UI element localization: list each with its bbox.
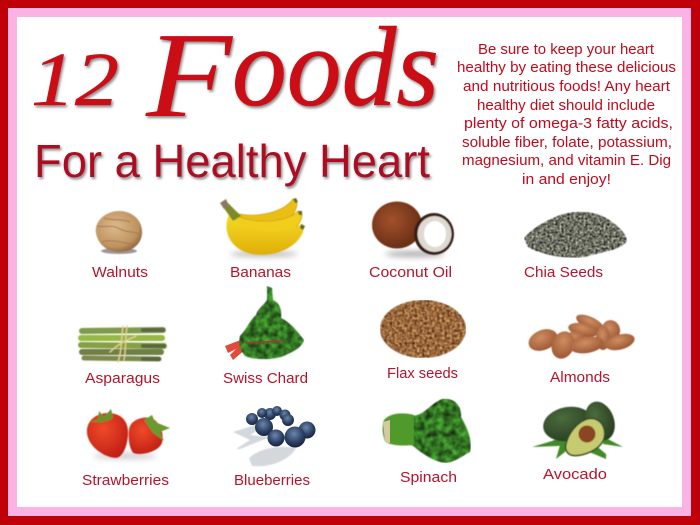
food: walnuts bbox=[92, 211, 148, 281]
title: 12 Foods bbox=[31, 5, 439, 143]
intro paragraph: Be sure to keep your heart bbox=[478, 41, 655, 58]
icon: spinach bbox=[383, 399, 471, 463]
icon: strawberries bbox=[87, 409, 170, 459]
food: bananas bbox=[220, 198, 305, 281]
intro paragraph: healthy by eating these delicious bbox=[457, 59, 676, 76]
food: almonds bbox=[525, 311, 636, 386]
icon: chia seeds pile bbox=[524, 212, 627, 258]
food: coconut oil bbox=[369, 202, 454, 281]
icon: almonds bbox=[525, 311, 636, 362]
icon: asparagus bundle bbox=[81, 326, 164, 362]
food: avocado bbox=[532, 397, 623, 483]
label: Almonds: Almonds bbox=[550, 369, 610, 386]
title: 12 Foods: 12 bbox=[31, 38, 119, 122]
label: Bananas: Bananas bbox=[230, 264, 291, 281]
intro paragraph: healthy diet should include bbox=[477, 97, 655, 114]
icon: swiss chard bbox=[225, 286, 304, 360]
intro paragraph: and nutritious foods! Any heart bbox=[463, 78, 671, 95]
label: Flax seeds: Flax seeds bbox=[387, 365, 458, 382]
label: Asparagus: Asparagus bbox=[85, 370, 160, 387]
title: 12 Foods: oods bbox=[232, 5, 439, 130]
title: 12 Foods: F bbox=[145, 8, 234, 143]
intro paragraph: plenty of omega-3 fatty acids, bbox=[464, 115, 673, 132]
intro paragraph bbox=[457, 41, 676, 188]
food: chia seeds bbox=[524, 212, 627, 281]
food: blueberries bbox=[233, 406, 316, 489]
icon: avocado bbox=[532, 397, 623, 459]
intro paragraph: in and enjoy! bbox=[522, 171, 611, 188]
intro paragraph: magnesium, and vitamin E. Dig bbox=[462, 152, 671, 169]
food: flax seeds bbox=[380, 300, 466, 382]
label: Coconut Oil: Coconut Oil bbox=[369, 264, 452, 281]
label: Spinach: Spinach bbox=[400, 469, 457, 486]
subtitle: For a Healthy Heart: For a Healthy Heart bbox=[34, 135, 430, 187]
food: spinach bbox=[383, 399, 471, 486]
label: Chia Seeds: Chia Seeds bbox=[524, 264, 603, 281]
label: Strawberries: Strawberries bbox=[82, 472, 169, 489]
icon: walnut bbox=[96, 211, 142, 254]
label: Swiss Chard: Swiss Chard bbox=[223, 370, 308, 387]
intro paragraph: soluble fiber, folate, potassium, bbox=[462, 134, 672, 151]
food: strawberries bbox=[82, 409, 170, 489]
icon: flax seeds pile bbox=[380, 300, 466, 358]
icon: bananas bbox=[220, 198, 305, 257]
food: swiss chard bbox=[223, 286, 308, 387]
label: Avocado: Avocado bbox=[543, 466, 607, 483]
icon: blueberries bbox=[233, 406, 316, 466]
food: asparagus bbox=[81, 326, 164, 387]
label: Walnuts: Walnuts bbox=[92, 264, 148, 281]
label: Blueberries: Blueberries bbox=[234, 472, 310, 489]
icon: coconut bbox=[372, 202, 454, 257]
